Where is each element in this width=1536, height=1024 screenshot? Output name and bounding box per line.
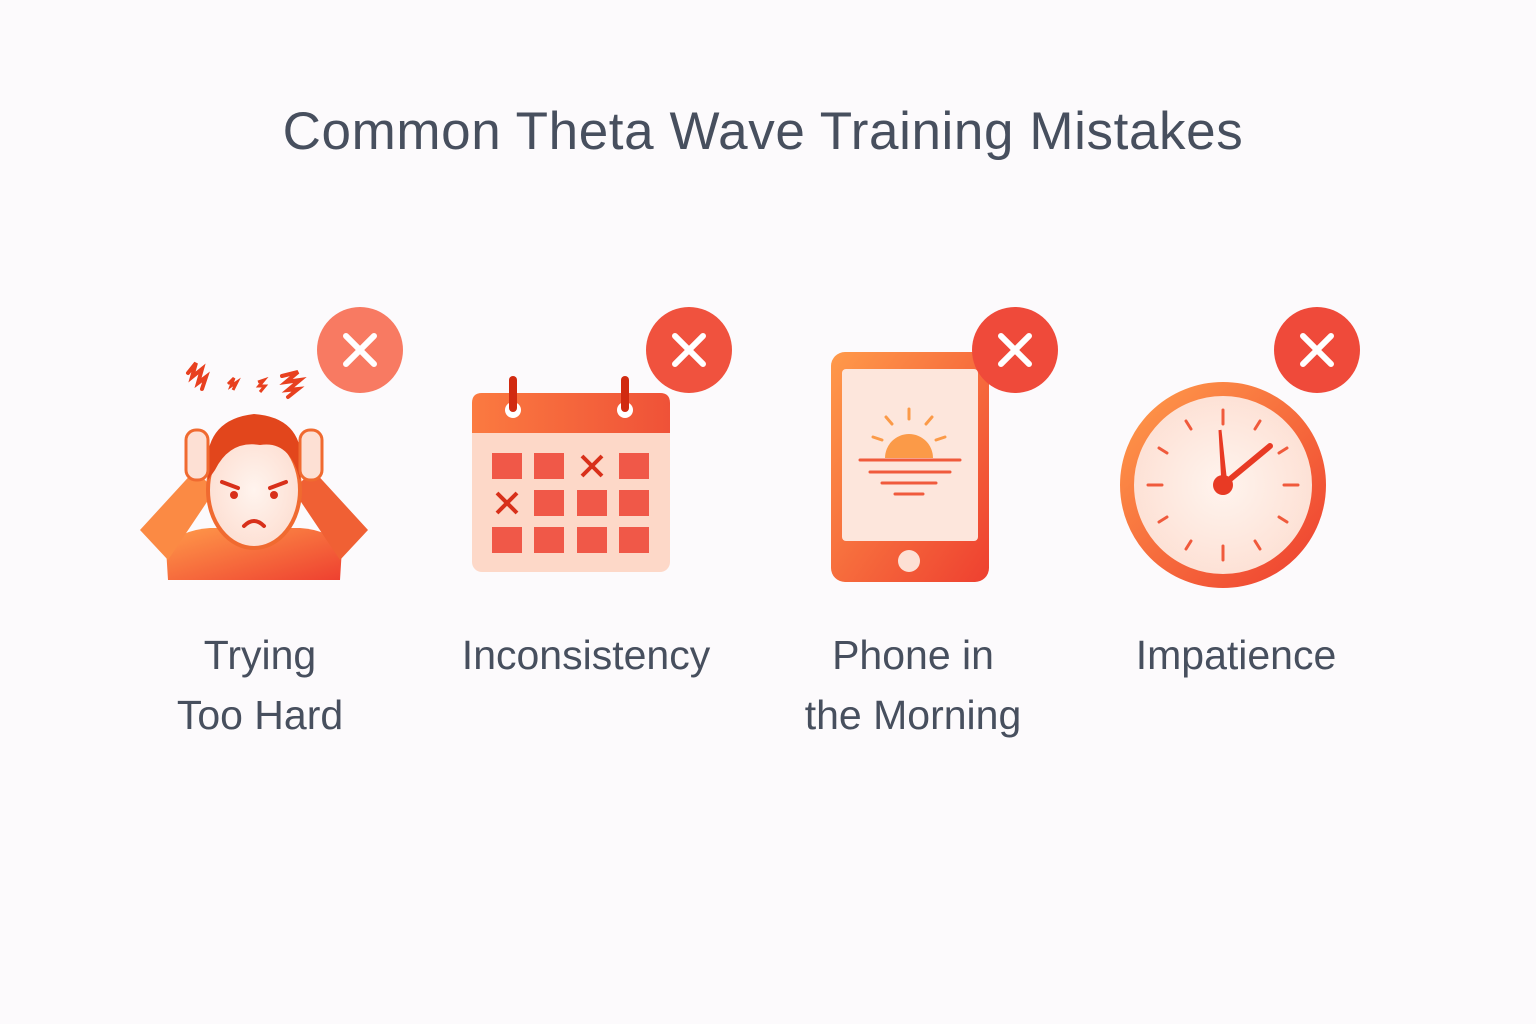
label: phone in the morning: Phone in xyxy=(832,632,994,678)
icon: calendar xyxy=(472,376,670,572)
icon: x badge 1 xyxy=(317,307,403,393)
label: trying too hard: Trying xyxy=(204,632,316,678)
icon: phone xyxy=(831,352,989,582)
icon: x badge 3 xyxy=(972,307,1058,393)
label: inconsistency: Inconsistency xyxy=(462,632,710,678)
icon: x badge 2 xyxy=(646,307,732,393)
icon: stressed person xyxy=(140,363,368,580)
label: phone in the morning: the Morning xyxy=(805,692,1021,738)
label: trying too hard: Too Hard xyxy=(177,692,343,738)
icon: clock xyxy=(1127,389,1319,581)
label: phone in the morning xyxy=(805,632,1021,738)
title: Common Theta Wave Training Mistakes xyxy=(283,102,1243,161)
label: impatience: Impatience xyxy=(1136,632,1336,678)
icon: x badge 4 xyxy=(1274,307,1360,393)
label: trying too hard xyxy=(177,632,343,738)
